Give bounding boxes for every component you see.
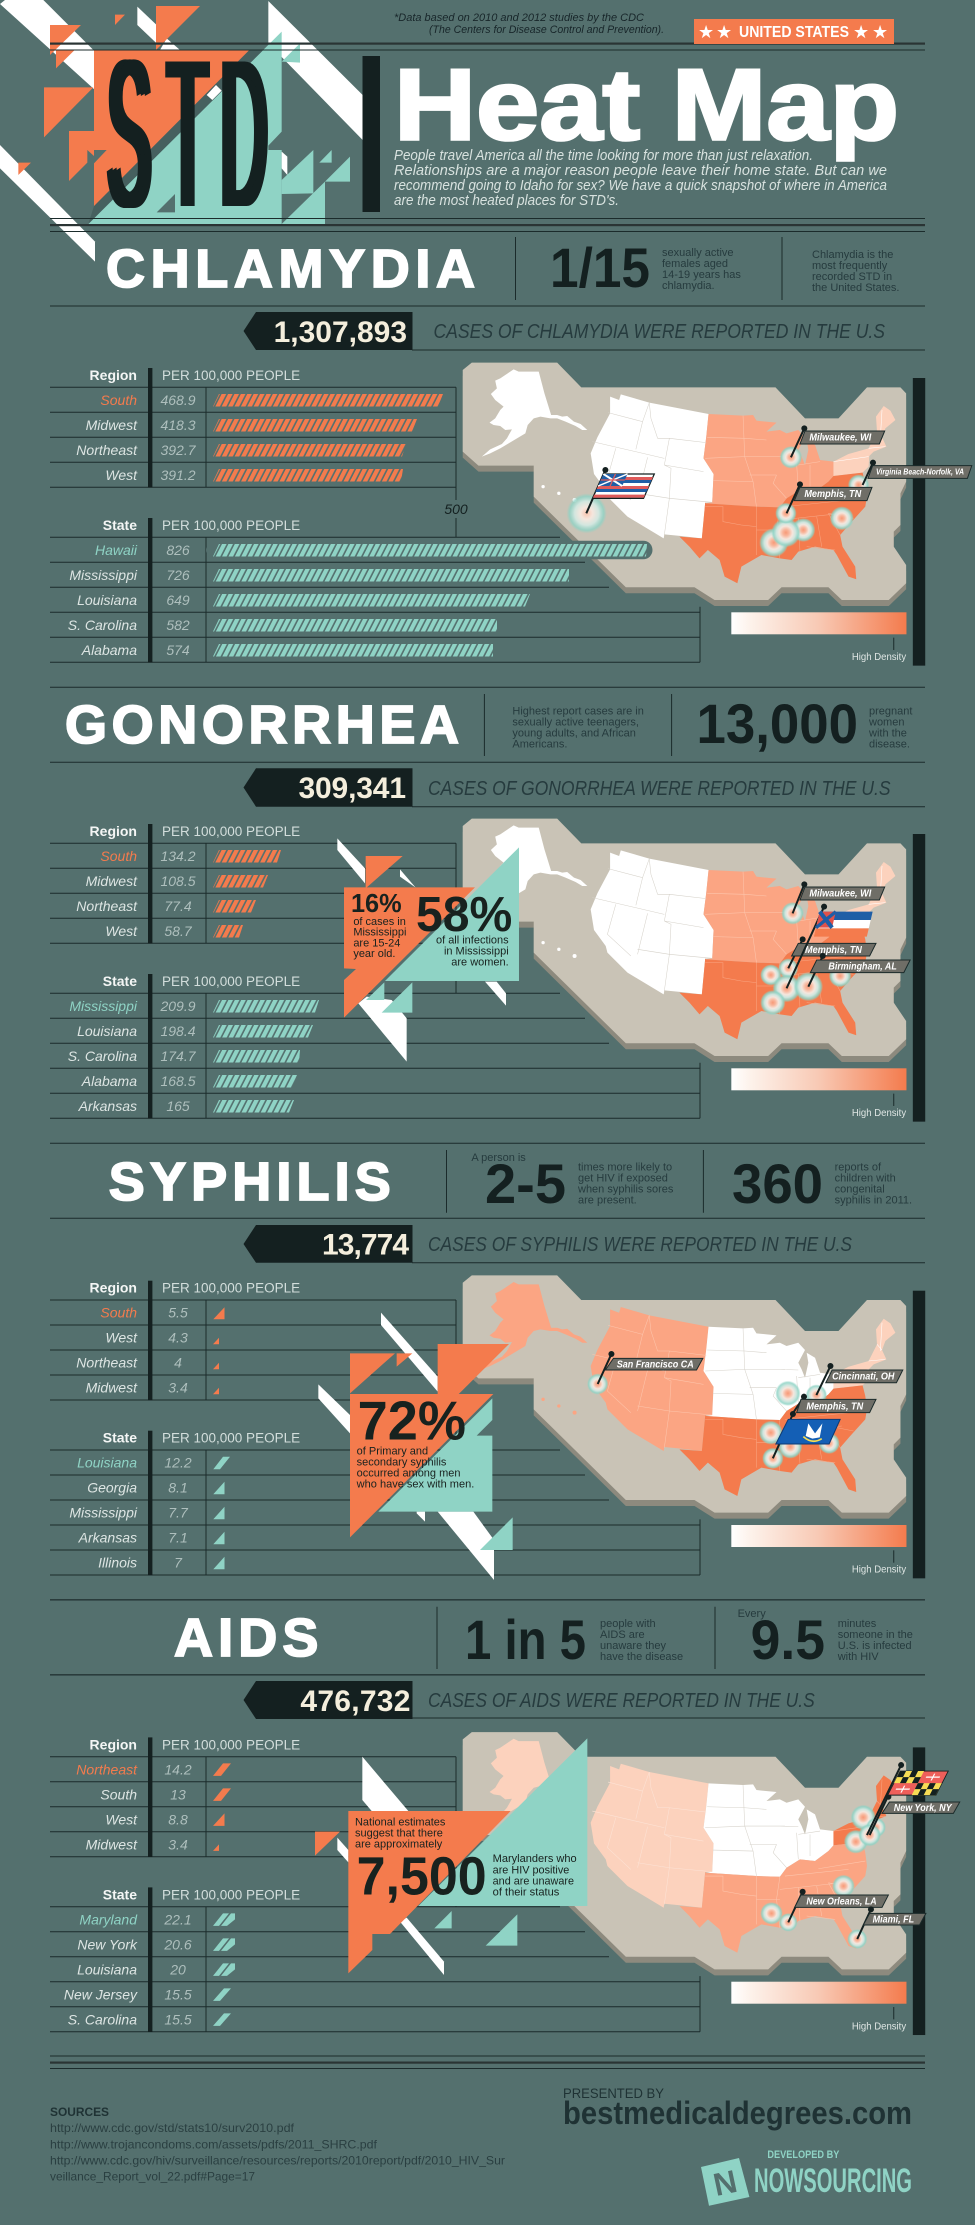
map: AIDS heat map bbox=[463, 1732, 960, 2035]
logo letters STD: T bbox=[164, 16, 204, 251]
stat: 9.5 minutes: Every bbox=[738, 1608, 766, 1620]
stat: 2-5: when syphilis sores bbox=[577, 1184, 674, 1196]
stat: 16%: year old. bbox=[353, 948, 395, 960]
note: highest report cases: Highest report cases are in bbox=[512, 706, 644, 718]
badge: United States: ★ bbox=[872, 22, 888, 43]
table: AIDS by state: State bbox=[103, 1886, 137, 1902]
total cases banner bbox=[244, 1681, 815, 1719]
table: AIDS by region: Region bbox=[90, 1736, 137, 1752]
table: AIDS by state: New Jersey bbox=[64, 1986, 138, 2002]
text: national estimates bbox=[355, 1817, 446, 1851]
stat: 360: congenital bbox=[835, 1184, 885, 1196]
sources list: veillance_Report_vol_22.pdf#Page=17 bbox=[50, 2170, 255, 2184]
stat: 58%: 58% bbox=[416, 888, 512, 942]
stat: 7,500: 7,500 bbox=[357, 1847, 487, 1906]
pin: Memphis: Memphis, TN bbox=[804, 489, 862, 500]
note: highest report cases: sexually active teenagers, bbox=[512, 716, 639, 728]
panel: chlamydia data and map: 500 bbox=[444, 501, 468, 517]
table: gonorrhea by state: S. Carolina bbox=[68, 1048, 137, 1064]
table: AIDS by region: Midwest bbox=[86, 1836, 138, 1852]
note: most frequently recorded: most frequently bbox=[812, 260, 888, 272]
table: AIDS by region: South bbox=[100, 1786, 137, 1802]
text: national estimates: are approximately bbox=[355, 1839, 443, 1851]
table: chlamydia by region: West bbox=[105, 467, 138, 483]
density legend: High Density bbox=[852, 1565, 906, 1576]
table: gonorrhea by region: 134.2 bbox=[160, 848, 196, 864]
total cases banner: CASES OF SYPHILIS WERE REPORTED IN THE U.S bbox=[428, 1234, 853, 1256]
table: AIDS by state: PER 100,000 PEOPLE bbox=[162, 1887, 300, 1902]
total cases banner: CASES OF CHLAMYDIA WERE REPORTED IN THE U.S bbox=[434, 321, 886, 343]
badge: United States: ★ bbox=[853, 22, 869, 43]
stat: 1 in 5 bbox=[465, 1608, 683, 1671]
table: syphilis by state: State bbox=[103, 1430, 137, 1446]
stat: 72% bbox=[356, 1389, 474, 1490]
table: chlamydia by region: 468.9 bbox=[160, 392, 196, 408]
table: gonorrhea by region: PER 100,000 PEOPLE bbox=[162, 824, 300, 839]
developed by NowSourcing: DEVELOPED BY bbox=[767, 2149, 840, 2161]
stat: 360: syphilis in 2011. bbox=[835, 1194, 912, 1206]
table: chlamydia by region: South bbox=[100, 392, 137, 408]
callout: syphilis 72% bbox=[318, 1313, 513, 1580]
total cases banner: CASES OF AIDS WERE REPORTED IN THE U.S bbox=[428, 1690, 815, 1712]
heading: SYPHILIS: SYPHILIS bbox=[109, 1152, 391, 1212]
sources list: http://www.cdc.gov/hiv/surveillance/resources/reports/2010report/pdf/2010_HIV_Sur bbox=[50, 2154, 505, 2168]
icon: N logo bbox=[701, 2158, 749, 2206]
table: AIDS by state: 22.1 bbox=[163, 1911, 192, 1927]
table: chlamydia by state: State bbox=[103, 517, 137, 533]
table: chlamydia by state: Mississippi bbox=[69, 567, 138, 583]
stat: 360: 360 bbox=[732, 1152, 823, 1215]
stat: 2-5: get HIV if exposed bbox=[578, 1172, 668, 1184]
text: national estimates: suggest that there bbox=[355, 1828, 443, 1840]
table: syphilis by region: Northeast bbox=[76, 1355, 138, 1371]
pin: Memphis: Memphis, TN bbox=[806, 1401, 864, 1412]
pin: Milwaukee: Milwaukee, WI bbox=[809, 889, 871, 900]
table: AIDS by state: 20.6 bbox=[163, 1936, 192, 1952]
table: chlamydia by state bbox=[68, 517, 647, 658]
section header: chlamydia bbox=[50, 236, 925, 350]
stat: 16% bbox=[351, 888, 406, 960]
total cases banner: 13,774 bbox=[322, 1228, 409, 1262]
density legend bbox=[731, 1982, 906, 2032]
pin: San Francisco bbox=[598, 1351, 703, 1384]
footer rules bbox=[50, 2056, 925, 2069]
stat: 9.5 minutes: with HIV bbox=[837, 1651, 879, 1663]
callout: AIDS 7,500 bbox=[315, 1738, 587, 1975]
pin: Milwaukee: Milwaukee, WI bbox=[809, 433, 871, 444]
table: AIDS by state: 15.5 bbox=[164, 1986, 192, 2002]
stat: 13,000: pregnant bbox=[869, 706, 912, 718]
table: gonorrhea by region bbox=[76, 823, 300, 939]
table: AIDS by state: 20 bbox=[169, 1961, 186, 1977]
text: Marylanders: are HIV positive bbox=[493, 1864, 569, 1876]
stat: 1/15 bbox=[550, 236, 741, 299]
callout: gonorrhea 16% and 58% bbox=[337, 838, 519, 1062]
stat: 1 in 5: unaware they bbox=[600, 1640, 667, 1652]
table: gonorrhea by region: 108.5 bbox=[160, 873, 196, 889]
stat: 13,000: women bbox=[868, 716, 904, 728]
panel: syphilis data and map bbox=[50, 1275, 925, 1578]
table: gonorrhea by region: 77.4 bbox=[164, 898, 192, 914]
stat: 58%: of all infections bbox=[436, 934, 509, 946]
table: gonorrhea by state: Alabama bbox=[81, 1073, 137, 1089]
logo: STD geometric emblem bbox=[0, 0, 363, 262]
stat: 16%: Mississippi bbox=[353, 927, 406, 939]
table: AIDS by region: West bbox=[105, 1811, 138, 1827]
table: syphilis by state: Georgia bbox=[87, 1480, 137, 1496]
table: syphilis by state: Illinois bbox=[98, 1555, 137, 1571]
sources list: http://www.cdc.gov/std/stats10/surv2010.pdf bbox=[50, 2121, 295, 2135]
sources list bbox=[50, 2107, 505, 2184]
table: chlamydia by region bbox=[76, 367, 443, 483]
table: gonorrhea by region: Northeast bbox=[76, 898, 138, 914]
table: chlamydia by region: Region bbox=[90, 367, 137, 383]
pin: Memphis bbox=[787, 481, 872, 513]
table: gonorrhea by state: Louisiana bbox=[77, 1023, 137, 1039]
pin: Virginia Beach bbox=[863, 460, 972, 485]
total cases banner: 476,732 bbox=[300, 1685, 410, 1718]
sources list: http://www.trojancondoms.com/assets/pdfs/2011_SHRC.pdf bbox=[50, 2138, 378, 2152]
stat: 72%: who have sex with men. bbox=[356, 1478, 474, 1490]
note: most frequently recorded: the United States. bbox=[812, 282, 899, 294]
table: syphilis by region: South bbox=[100, 1305, 137, 1321]
badge: United States: ★ bbox=[716, 22, 732, 43]
table: chlamydia by state: Alabama bbox=[81, 642, 137, 658]
table: gonorrhea by region: Region bbox=[90, 823, 137, 839]
density legend: High Density bbox=[852, 652, 906, 663]
table: syphilis by state: PER 100,000 PEOPLE bbox=[162, 1431, 300, 1446]
table: gonorrhea by state: 198.4 bbox=[160, 1023, 196, 1039]
pin: New Orleans bbox=[788, 1889, 888, 1922]
total cases banner bbox=[244, 312, 886, 350]
stat: 1 in 5: AIDS are bbox=[600, 1629, 645, 1641]
density legend: High Density bbox=[852, 2021, 906, 2032]
table: syphilis by state: 8.1 bbox=[168, 1480, 188, 1496]
table: AIDS by state: 15.5 bbox=[164, 2011, 192, 2027]
stat: 9.5 minutes: minutes bbox=[838, 1618, 877, 1630]
table: syphilis by region: Region bbox=[90, 1280, 137, 1296]
stat: 72%: of Primary and bbox=[357, 1445, 428, 1457]
density legend bbox=[731, 1068, 906, 1119]
table: chlamydia by state: Louisiana bbox=[77, 592, 137, 608]
table: AIDS by state: Louisiana bbox=[77, 1961, 137, 1977]
stat: 1 in 5: people with bbox=[600, 1618, 656, 1630]
title: Heat Map: Heat Map bbox=[394, 50, 899, 162]
text: Marylanders bbox=[493, 1853, 577, 1898]
table: chlamydia by state: 726 bbox=[166, 567, 190, 583]
heading: CHLAMYDIA: CHLAMYDIA bbox=[106, 239, 475, 299]
total cases banner bbox=[244, 1225, 853, 1263]
table: chlamydia by state: S. Carolina bbox=[68, 617, 137, 633]
flag: Louisiana bbox=[773, 1411, 840, 1458]
table: gonorrhea by region: West bbox=[105, 923, 138, 939]
table: chlamydia by state: 574 bbox=[166, 642, 190, 658]
intro paragraph: People travel America all the time looking for more than just relaxation. bbox=[394, 148, 813, 164]
pin: San Francisco: San Francisco CA bbox=[617, 1360, 694, 1371]
stat: 9.5 minutes: U.S. is infected bbox=[838, 1640, 912, 1652]
stat: 13,000: 13,000 bbox=[696, 692, 858, 755]
table: chlamydia by state: 649 bbox=[166, 592, 190, 608]
stat: 13,000: with the bbox=[868, 728, 907, 740]
heading: GONORRHEA: GONORRHEA bbox=[65, 695, 459, 755]
title divider bar bbox=[362, 56, 380, 212]
stat: 72%: 72% bbox=[358, 1389, 466, 1451]
logo: STD geometric emblem: D bbox=[217, 16, 263, 251]
table: gonorrhea by state: Mississippi bbox=[69, 998, 138, 1014]
text: Marylanders: Marylanders who bbox=[493, 1853, 577, 1865]
pin: Miami: Miami, FL bbox=[873, 1915, 914, 1926]
table: syphilis by state: 7.1 bbox=[168, 1530, 188, 1546]
stat: 2-5: times more likely to bbox=[578, 1162, 672, 1174]
pin: New Orleans: New Orleans, LA bbox=[806, 1897, 877, 1908]
table: syphilis by state: 12.2 bbox=[164, 1455, 192, 1471]
stat: 58% bbox=[416, 888, 512, 968]
table: syphilis by state: Mississippi bbox=[69, 1505, 138, 1521]
table: AIDS by state bbox=[64, 1886, 300, 2027]
table: gonorrhea by state: 168.5 bbox=[160, 1073, 196, 1089]
table: chlamydia by region: Midwest bbox=[86, 417, 138, 433]
map: chlamydia heat map bbox=[463, 363, 972, 666]
table: gonorrhea by region: Midwest bbox=[86, 873, 138, 889]
table: chlamydia by region: PER 100,000 PEOPLE bbox=[162, 368, 300, 383]
stat: 16%: 16% bbox=[351, 888, 402, 918]
pin: Birmingham bbox=[808, 953, 910, 987]
panel: AIDS data and map bbox=[50, 1732, 960, 2035]
table: AIDS by region: 8.8 bbox=[168, 1811, 188, 1827]
stat: 58%: in Mississippi bbox=[444, 945, 509, 957]
stat: 2-5: A person is bbox=[471, 1152, 526, 1164]
table: chlamydia by state: 826 bbox=[166, 542, 190, 558]
table: gonorrhea by region: South bbox=[100, 848, 137, 864]
density legend bbox=[731, 1525, 906, 1576]
stat: 1/15: sexually active bbox=[662, 247, 734, 259]
data source note: (The Centers for Disease Control and Prevention). bbox=[429, 24, 664, 36]
stat: 1/15: females aged bbox=[662, 258, 728, 270]
table: syphilis by state: Arkansas bbox=[78, 1530, 137, 1546]
pin: Memphis: Memphis, TN bbox=[805, 945, 863, 956]
section header: syphilis bbox=[50, 1143, 925, 1263]
data source note: *Data based on 2010 and 2012 studies by the CDC bbox=[394, 12, 644, 24]
table: gonorrhea by state: Arkansas bbox=[78, 1098, 137, 1114]
total cases banner bbox=[244, 768, 891, 807]
stat: 16%: are 15-24 bbox=[353, 937, 400, 949]
note: most frequently recorded: Chlamydia is the bbox=[812, 249, 893, 261]
total cases banner: 1,307,893 bbox=[274, 316, 407, 349]
stat: 72%: secondary syphilis bbox=[357, 1456, 447, 1468]
total cases banner: CASES OF GONORRHEA WERE REPORTED IN THE U.S bbox=[428, 778, 891, 800]
density legend bbox=[731, 612, 906, 663]
table: syphilis by region: 4.3 bbox=[168, 1330, 188, 1346]
intro paragraph: are the most heated places for STD's. bbox=[394, 193, 619, 209]
intro paragraph bbox=[394, 148, 887, 209]
stat: 2-5: 2-5 bbox=[485, 1152, 566, 1215]
table: chlamydia by region: Northeast bbox=[76, 442, 138, 458]
table: gonorrhea by state: PER 100,000 PEOPLE bbox=[162, 974, 300, 989]
stat: 72%: occurred among men bbox=[357, 1468, 460, 1480]
note: highest report cases: Americans. bbox=[512, 738, 567, 750]
sources list: SOURCES bbox=[50, 2107, 109, 2119]
table: syphilis by region: 4 bbox=[174, 1355, 182, 1371]
table: syphilis by state: 7.7 bbox=[168, 1505, 189, 1521]
table: AIDS by region: 3.4 bbox=[168, 1836, 188, 1852]
table: syphilis by state bbox=[69, 1430, 300, 1571]
highlight: Hawaii row bbox=[206, 541, 652, 559]
pin: Birmingham: Birmingham, AL bbox=[828, 962, 897, 973]
section header: gonorrhea bbox=[50, 687, 925, 807]
flag: Maryland bbox=[867, 1762, 948, 1835]
badge: United States bbox=[694, 19, 894, 44]
pin: Cincinnati bbox=[816, 1363, 903, 1395]
pin: Memphis bbox=[788, 936, 876, 968]
table: gonorrhea by state: State bbox=[103, 973, 137, 989]
table: AIDS by state: New York bbox=[77, 1936, 138, 1952]
pin: Cincinnati: Cincinnati, OH bbox=[832, 1372, 895, 1383]
flag: Mississippi bbox=[787, 904, 873, 988]
table: chlamydia by region: 418.3 bbox=[160, 417, 196, 433]
table: AIDS by state: S. Carolina bbox=[68, 2011, 137, 2027]
stat: 1/15: chlamydia. bbox=[662, 280, 715, 292]
icon: N logo: N bbox=[710, 2163, 740, 2203]
table: syphilis by state: 7 bbox=[174, 1555, 183, 1571]
stat: 360 bbox=[732, 1152, 912, 1215]
data source note bbox=[394, 12, 664, 36]
table: AIDS by region: PER 100,000 PEOPLE bbox=[162, 1737, 300, 1752]
table: AIDS by state: Maryland bbox=[79, 1911, 138, 1927]
table: syphilis by region: West bbox=[105, 1330, 138, 1346]
stat: 9.5 minutes: 9.5 bbox=[751, 1608, 825, 1671]
stat: 1/15: 14-19 years has bbox=[662, 269, 741, 281]
table: syphilis by region: 3.4 bbox=[168, 1380, 188, 1396]
section header: AIDS bbox=[50, 1599, 925, 1719]
pin: Memphis bbox=[793, 1394, 876, 1413]
density legend: High Density bbox=[852, 1108, 906, 1119]
presented by: bestmedicaldegrees.com bbox=[563, 2095, 912, 2131]
text: national estimates: National estimates bbox=[355, 1817, 446, 1829]
table: gonorrhea by state: 165 bbox=[166, 1098, 190, 1114]
note: most frequently recorded bbox=[812, 249, 899, 294]
table: chlamydia by state: Hawaii bbox=[95, 542, 138, 558]
panel: chlamydia data and map bbox=[50, 363, 972, 666]
pin: Miami bbox=[857, 1906, 926, 1939]
table: AIDS by region: 13 bbox=[170, 1786, 186, 1802]
stat: 58%: are women. bbox=[451, 956, 509, 968]
table: syphilis by state: Louisiana bbox=[77, 1455, 137, 1471]
table: AIDS by region: 14.2 bbox=[164, 1761, 192, 1777]
stat: 1 in 5: 1 in 5 bbox=[465, 1608, 586, 1671]
map: gonorrhea heat map bbox=[463, 819, 925, 1122]
stat: 1/15: 1/15 bbox=[550, 236, 650, 299]
stat: 16%: of cases in bbox=[353, 916, 406, 928]
table: chlamydia by region: 391.2 bbox=[160, 467, 196, 483]
text: Marylanders: and are unaware bbox=[493, 1875, 574, 1887]
intro paragraph: Relationships are a major reason people leave their home state. But can we bbox=[394, 163, 887, 179]
table: AIDS by region: Northeast bbox=[76, 1761, 138, 1777]
stat: 2-5 bbox=[471, 1152, 674, 1215]
pin: New York: New York, NY bbox=[894, 1803, 953, 1814]
flag: Hawaii bbox=[586, 467, 654, 513]
table: chlamydia by state: 582 bbox=[166, 617, 190, 633]
intro paragraph: recommend going to Idaho for sex? We have a quick snapshot of where in America bbox=[394, 178, 887, 194]
presented by: PRESENTED BY bbox=[563, 2085, 665, 2101]
text: Marylanders: of their status bbox=[493, 1886, 560, 1898]
note: most frequently recorded: recorded STD in bbox=[812, 271, 892, 283]
table: syphilis by region: Midwest bbox=[86, 1380, 138, 1396]
table: syphilis by region: PER 100,000 PEOPLE bbox=[162, 1281, 300, 1296]
table: chlamydia by state: PER 100,000 PEOPLE bbox=[162, 518, 300, 533]
table: gonorrhea by state: 174.7 bbox=[160, 1048, 197, 1064]
table: gonorrhea by state bbox=[68, 973, 319, 1114]
stat: 2-5: are present. bbox=[578, 1194, 637, 1206]
table: gonorrhea by region: 58.7 bbox=[164, 923, 193, 939]
stat: 360: reports of bbox=[835, 1162, 882, 1174]
note: highest report cases: young adults, and African bbox=[512, 728, 636, 740]
pin: Milwaukee bbox=[791, 425, 885, 457]
developed by NowSourcing bbox=[701, 2149, 912, 2206]
stat: 1 in 5: have the disease bbox=[600, 1651, 683, 1663]
logo letters STD: S bbox=[104, 16, 147, 251]
header rules bbox=[50, 42, 925, 232]
table: gonorrhea by state: 209.9 bbox=[159, 998, 196, 1014]
table: syphilis by region bbox=[76, 1280, 300, 1396]
stat: 9.5 minutes: someone in the bbox=[838, 1629, 913, 1641]
panel: gonorrhea data and map bbox=[50, 819, 925, 1122]
pin: New York bbox=[870, 1794, 960, 1835]
badge: United States: UNITED STATES bbox=[739, 24, 849, 41]
table: syphilis by region: 5.5 bbox=[168, 1305, 188, 1321]
note: highest report cases bbox=[512, 706, 644, 750]
map: syphilis heat map bbox=[463, 1275, 925, 1578]
table: AIDS by region bbox=[76, 1736, 300, 1852]
stat: 9.5 minutes bbox=[738, 1608, 913, 1671]
total cases banner: 309,341 bbox=[298, 772, 406, 805]
stat: 13,000: disease. bbox=[869, 738, 910, 750]
stat: 360: children with bbox=[835, 1172, 896, 1184]
pin: Milwaukee bbox=[793, 881, 885, 913]
heading: AIDS: AIDS bbox=[174, 1608, 318, 1668]
table: chlamydia by region: 392.7 bbox=[160, 442, 197, 458]
badge: United States: ★ bbox=[698, 22, 714, 43]
